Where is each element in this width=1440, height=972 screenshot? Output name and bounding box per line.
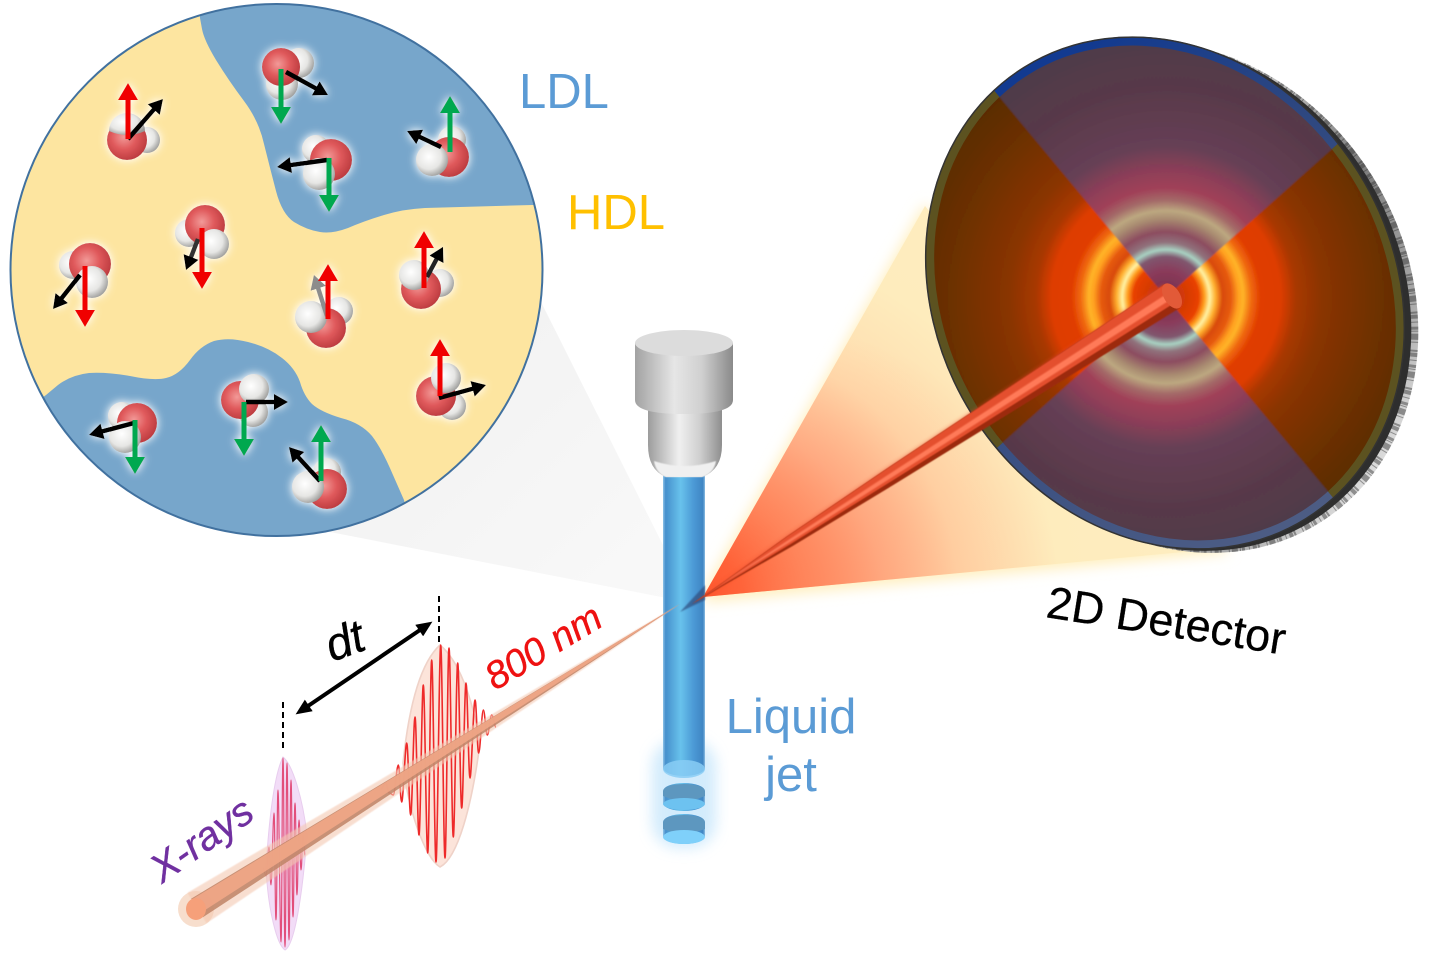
label: LDL: LDL: [519, 65, 609, 119]
label: 800 nm: 800 nm: [477, 596, 610, 699]
jet glow: [652, 740, 716, 848]
nozzle: [635, 330, 733, 477]
label: Liquid jet: Liquid: [726, 690, 856, 744]
X-ray pulse envelope: [266, 757, 307, 950]
beam tip: [1158, 280, 1186, 312]
800 nm wave: [381, 645, 496, 862]
molecule: HDL 1: [107, 99, 160, 160]
molecule: HDL 5: [175, 205, 229, 273]
label: Liquid jet: jet: [763, 748, 817, 802]
molecule: LDL 10: [102, 402, 157, 458]
beam crossing shadow on jet: [680, 585, 705, 612]
molecule: LDL 11: [221, 374, 275, 440]
molecule: LDL 3: [290, 135, 352, 196]
molecule: HDL 6: [59, 243, 111, 311]
droplet 1: [663, 783, 705, 811]
detector face with scattering rings: [934, 46, 1396, 540]
molecule: LDL 4: [416, 112, 469, 177]
jet column: [663, 472, 705, 776]
dt double arrow: [308, 630, 420, 706]
800 nm pulse envelope: [403, 645, 480, 867]
molecule: HDL 9: [416, 355, 474, 420]
liquid jet: [635, 330, 733, 848]
droplet 2: [663, 814, 705, 844]
molecule: LDL 2: [262, 48, 317, 108]
scattered light cone: [703, 204, 1230, 602]
dashed marker 800 nm: [438, 596, 440, 645]
molecule: LDL 12: [292, 441, 347, 509]
2D detector disc: [924, 36, 1418, 553]
LDL regions: [44, 5, 534, 535]
incoming beam: [178, 604, 680, 927]
label: X-rays: X-rays: [141, 789, 262, 892]
molecule: HDL 7: [295, 280, 353, 348]
label: HDL: HDL: [567, 186, 665, 240]
panel: water molecule zoom circle: [10, 3, 544, 537]
detector edge: [838, 0, 1440, 643]
gray projection cone from molecule circle to jet: [320, 280, 692, 603]
dashed marker X-rays: [282, 702, 284, 750]
label: 2D Detector: 2D Detector: [1043, 577, 1289, 665]
molecule: HDL 8: [399, 247, 454, 309]
X-ray wave: [263, 758, 305, 947]
label: dt: dt: [318, 609, 374, 671]
beam end cap: [186, 898, 206, 920]
outgoing beam to detector: [692, 280, 1186, 604]
